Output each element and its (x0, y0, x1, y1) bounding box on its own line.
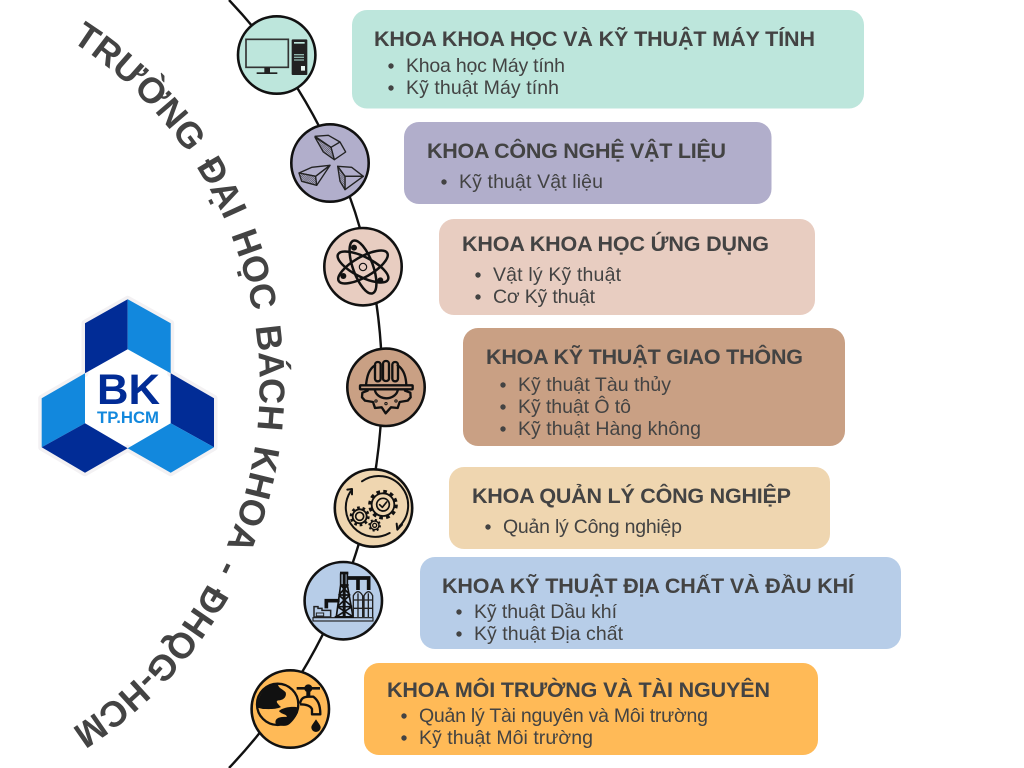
panel: Khoa Môi trường và Tài nguyên: Quản lý Tài nguyên và Môi trường (419, 705, 708, 727)
icon: helmet and gear (347, 349, 425, 426)
icon: gears (335, 469, 412, 547)
panel: Khoa Khoa học và Kỹ thuật Máy tính: KHOA KHOA HỌC VÀ KỸ THUẬT MÁY TÍNH (374, 26, 815, 51)
timeline curve (229, 0, 382, 768)
logo: BK TP.HCM: BK (97, 366, 160, 414)
panel: Khoa Môi trường và Tài nguyên (364, 663, 818, 755)
panel: Khoa Kỹ thuật Giao thông: Kỹ thuật Tàu thủy (518, 374, 671, 396)
panel: Khoa Công nghệ Vật liệu: KHOA CÔNG NGHỆ VẬT LIỆU (427, 138, 726, 163)
panel: Khoa Công nghệ Vật liệu (404, 122, 772, 204)
panel: Khoa Khoa học Ứng dụng: KHOA KHOA HỌC ỨNG DỤNG (462, 231, 769, 256)
icon: earth and water tap (252, 670, 329, 748)
panel: Khoa Quản lý Công nghiệp (449, 467, 830, 549)
icon: computer (238, 16, 315, 94)
icon: oil refinery (305, 562, 382, 639)
panel: Khoa Quản lý Công nghiệp: Quản lý Công nghiệp (503, 516, 682, 538)
panel: Khoa Môi trường và Tài nguyên: Kỹ thuật Môi trường (419, 727, 593, 749)
panel: Khoa Kỹ thuật Giao thông: KHOA KỸ THUẬT GIAO THÔNG (486, 344, 803, 369)
icon: materials (291, 124, 369, 202)
icon: atom (324, 228, 402, 305)
panel: Khoa Kỹ thuật Giao thông: Kỹ thuật Hàng không (518, 418, 701, 440)
logo: BK TP.HCM: TP.HCM (97, 409, 159, 427)
panel: Khoa Kỹ thuật Giao thông (463, 328, 845, 446)
panel: Khoa Kỹ thuật Giao thông: Kỹ thuật Ô tô (518, 395, 631, 418)
panel: Khoa Kỹ thuật Địa chất và Dầu khí: KHOA KỸ THUẬT ĐỊA CHẤT VÀ ĐẦU KHÍ (442, 573, 855, 598)
panel: Khoa Kỹ thuật Địa chất và Dầu khí (420, 557, 901, 649)
panel: Khoa Khoa học Ứng dụng: Vật lý Kỹ thuật (493, 264, 622, 286)
logo: BK TP.HCM (42, 299, 214, 473)
panel: Khoa Khoa học Ứng dụng: Cơ Kỹ thuật (493, 286, 596, 308)
curved title: TRƯỜNG ĐẠI HỌC BÁCH KHOA - ĐHQG-HCM (74, 20, 292, 748)
panel: Khoa Khoa học và Kỹ thuật Máy tính: Kỹ thuật Máy tính (406, 77, 559, 99)
panel: Khoa Kỹ thuật Địa chất và Dầu khí: Kỹ thuật Địa chất (474, 623, 624, 645)
panel: Khoa Khoa học Ứng dụng (439, 219, 815, 315)
panel: Khoa Quản lý Công nghiệp: KHOA QUẢN LÝ CÔNG NGHIỆP (472, 483, 791, 508)
panel: Khoa Môi trường và Tài nguyên: KHOA MÔI TRƯỜNG VÀ TÀI NGUYÊN (387, 677, 770, 702)
panel: Khoa Công nghệ Vật liệu: Kỹ thuật Vật liệu (459, 171, 603, 193)
panel: Khoa Kỹ thuật Địa chất và Dầu khí: Kỹ thuật Dầu khí (474, 601, 618, 623)
panel: Khoa Khoa học và Kỹ thuật Máy tính: Khoa học Máy tính (406, 55, 565, 77)
panel: Khoa Khoa học và Kỹ thuật Máy tính (352, 10, 864, 108)
